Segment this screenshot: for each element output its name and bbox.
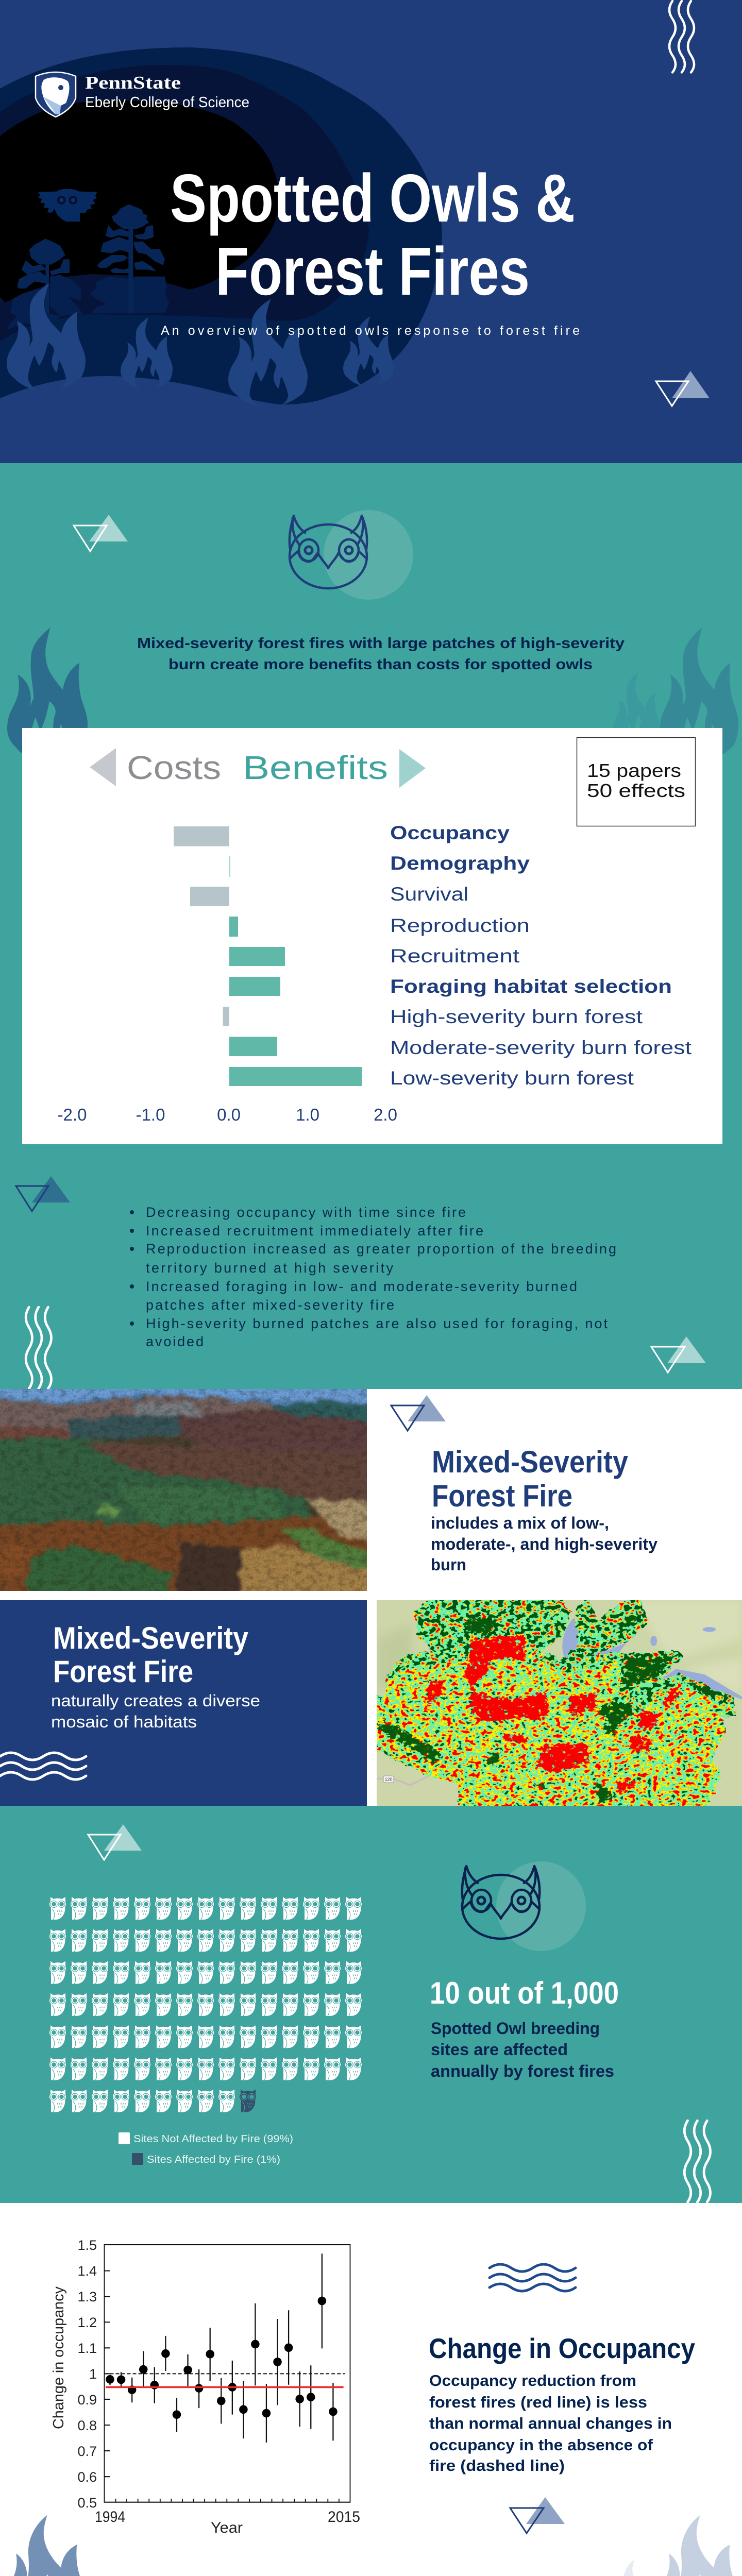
chart x-axis labels: 1994: [95, 2509, 125, 2526]
text: bullet list: territory burned at high severity: [146, 1260, 394, 1276]
chart labels: Moderate-severity burn forest: [390, 1037, 692, 1058]
chart x-axis labels: [95, 2509, 360, 2536]
icon: waves: [0, 1753, 86, 1780]
title: [170, 160, 575, 309]
legend: costs label: Costs: [127, 749, 221, 786]
text: bullet list: Increased foraging in low- and moderate-severity burned: [146, 1279, 577, 1294]
icon: flames bottom right: [610, 2515, 738, 2576]
icon: flames: [7, 283, 394, 406]
text: bullet list: avoided: [146, 1334, 204, 1349]
hill: [0, 376, 361, 463]
icon: waves right: [684, 2121, 711, 2202]
chart axis labels: 0.8: [77, 2418, 97, 2433]
chart axis: -2.0: [58, 1105, 87, 1124]
panel: change in occupancy text: [429, 2264, 695, 2533]
chart labels: Low-severity burn forest: [390, 1067, 634, 1089]
chart axis labels: 1.1: [77, 2341, 97, 2356]
pictogram: owl grid of sites: [49, 1897, 362, 2112]
chart axis labels: 1.5: [77, 2238, 97, 2253]
text: bullet list: Reproduction increased as greater proportion of the breeding: [146, 1241, 616, 1257]
text block: sites are affected: [431, 2040, 568, 2059]
icon: triangles: [88, 1824, 142, 1860]
callout: sample size box: [577, 738, 696, 826]
logo: Penn State shield: [36, 72, 76, 117]
heading: [53, 1621, 249, 1689]
chart labels: Occupancy: [390, 822, 510, 843]
chart axis labels: [77, 2238, 97, 2511]
icon: triangles: [656, 371, 710, 406]
illustration: tree silhouettes: [7, 205, 169, 330]
callout: sample size box: 50 effects: [587, 780, 685, 801]
icon: triangles: [74, 515, 128, 551]
text: key message: [137, 635, 625, 673]
heading: Change in Occupancy: [429, 2332, 695, 2364]
chart axis labels: 1.4: [77, 2263, 97, 2279]
chart labels: Foraging habitat selection: [390, 976, 672, 997]
chart: change in occupancy by year: [50, 2238, 360, 2536]
panel: mosaic of habitats: [0, 1600, 367, 1806]
legend: affected: Sites Affected by Fire (1%): [147, 2154, 280, 2165]
text: key message: burn create more benefits than costs for spotted owls: [168, 656, 593, 673]
text block: Spotted Owl breeding: [431, 2019, 600, 2038]
subtitle: An overview of spotted owls response to forest fire: [161, 324, 580, 338]
text block: occupancy in the absence of: [429, 2436, 653, 2454]
road: [377, 1776, 428, 1785]
icon: owl with circle: [462, 1861, 586, 1951]
chart axis labels: 1: [89, 2366, 97, 2382]
icon: owl silhouette: [38, 189, 97, 222]
text block: includes a mix of low-,: [431, 1514, 609, 1532]
text: key message: Mixed-severity forest fires with large patches of high-severity: [137, 635, 625, 652]
text: bullet list: Decreasing occupancy with time since fire: [146, 1205, 466, 1220]
chart axis: 2.0: [374, 1105, 397, 1124]
text: bullet list: patches after mixed-severity fire: [146, 1297, 394, 1313]
chart labels: Reproduction: [390, 915, 530, 936]
panel: costs and benefits chart: [22, 728, 722, 1144]
chart x-axis labels: Year: [211, 2519, 243, 2536]
text block: burn: [431, 1555, 466, 1574]
logo text: Penn State Eberly College of Science: Eberly College of Science: [85, 94, 249, 111]
chart x-axis labels: 2015: [328, 2509, 360, 2526]
logo text: Penn State Eberly College of Science: [85, 73, 249, 111]
icon: triangles: [391, 1395, 446, 1431]
icon: waves: [490, 2264, 576, 2291]
panel: mixed severity definition text: [391, 1395, 657, 1574]
chart axis labels: 0.9: [77, 2392, 97, 2408]
icon: flame bottom left: [5, 2515, 85, 2576]
chart axis: 0.0: [217, 1105, 241, 1124]
heading: Forest Fire: [53, 1654, 193, 1689]
title: Forest Fires: [215, 233, 530, 309]
panel: findings list: [16, 1176, 706, 1388]
photo: aerial view of burned forest: [0, 1389, 367, 1591]
bar chart: [174, 826, 362, 1086]
text block: Occupancy reduction from: [429, 2371, 636, 2389]
icon: waves top right: [669, 1, 694, 72]
panel: teal summary section: [0, 463, 742, 1389]
heading: [432, 1445, 629, 1513]
legend: costs arrow: [90, 748, 116, 786]
text: bullet list: High-severity burned patches are also used for foraging, not: [146, 1316, 608, 1331]
text block: annually by forest fires: [431, 2062, 614, 2080]
panel: affected sites: [0, 1806, 742, 2203]
icon: triangles right: [651, 1336, 706, 1372]
burn severity pattern: [377, 1600, 742, 1806]
chart axis labels: 0.5: [77, 2495, 97, 2511]
chart labels: Survival: [390, 884, 468, 905]
map: burn severity mosaic: [377, 1600, 742, 1806]
chart axis: -1.0: [136, 1105, 165, 1124]
chart labels: Recruitment: [390, 945, 520, 967]
icon: waves left: [26, 1307, 52, 1388]
text: bullet list: Increased recruitment immediately after fire: [146, 1223, 483, 1239]
icon: triangles: [510, 2497, 565, 2533]
title: Spotted Owls &: [170, 160, 575, 236]
text block: mosaic of habitats: [51, 1713, 197, 1731]
heading: Mixed-Severity: [432, 1445, 629, 1479]
logo text: Penn State Eberly College of Science: PennState: [85, 73, 181, 93]
heading: Mixed-Severity: [53, 1621, 249, 1655]
icon: triangles: [16, 1176, 70, 1211]
text block: [431, 1514, 657, 1574]
gap between blue panel and map: [367, 1600, 377, 1806]
chart labels: [390, 822, 692, 1089]
text block: naturally creates a diverse: [51, 1691, 260, 1710]
route marker: 120: [384, 1777, 393, 1782]
illustration: layered night sky blobs: [0, 47, 442, 412]
chart axis labels: 0.7: [77, 2444, 97, 2459]
text block: [429, 2371, 672, 2475]
icon: flames right: [613, 628, 738, 761]
chart labels: High-severity burn forest: [390, 1006, 643, 1027]
panel: mixed severity white block: [367, 1389, 742, 1600]
text block: [51, 1691, 260, 1731]
legend: benefits arrow: [399, 749, 426, 788]
route marker: [383, 1776, 394, 1783]
icon: owl with circle: [290, 510, 413, 600]
text: bullet list: [130, 1205, 616, 1349]
text block: forest fires (red line) is less: [429, 2393, 647, 2411]
callout: sample size box: 15 papers: [587, 760, 681, 781]
chart axis labels: 1.3: [77, 2289, 97, 2304]
text block: than normal annual changes in: [429, 2414, 672, 2432]
heading: statistic: 10 out of 1,000: [430, 1976, 619, 2010]
legend: benefits label: Benefits: [243, 749, 388, 786]
heading: Forest Fire: [432, 1479, 572, 1513]
chart axis labels: 1.2: [77, 2315, 97, 2330]
icon: flame left: [7, 628, 88, 761]
chart axis: [58, 1105, 397, 1124]
chart axis labels: 0.6: [77, 2469, 97, 2485]
chart labels: Demography: [390, 853, 530, 874]
legend: not affected: Sites Not Affected by Fire (99%): [133, 2133, 293, 2145]
chart axis: 1.0: [296, 1105, 319, 1124]
text block: fire (dashed line): [429, 2456, 565, 2475]
panel: hero header: [0, 0, 742, 463]
chart y-axis title: Change in occupancy: [50, 2286, 67, 2429]
lakes: [562, 1618, 742, 1699]
text block: [431, 2019, 614, 2080]
text block: moderate-, and high-severity: [431, 1535, 657, 1553]
